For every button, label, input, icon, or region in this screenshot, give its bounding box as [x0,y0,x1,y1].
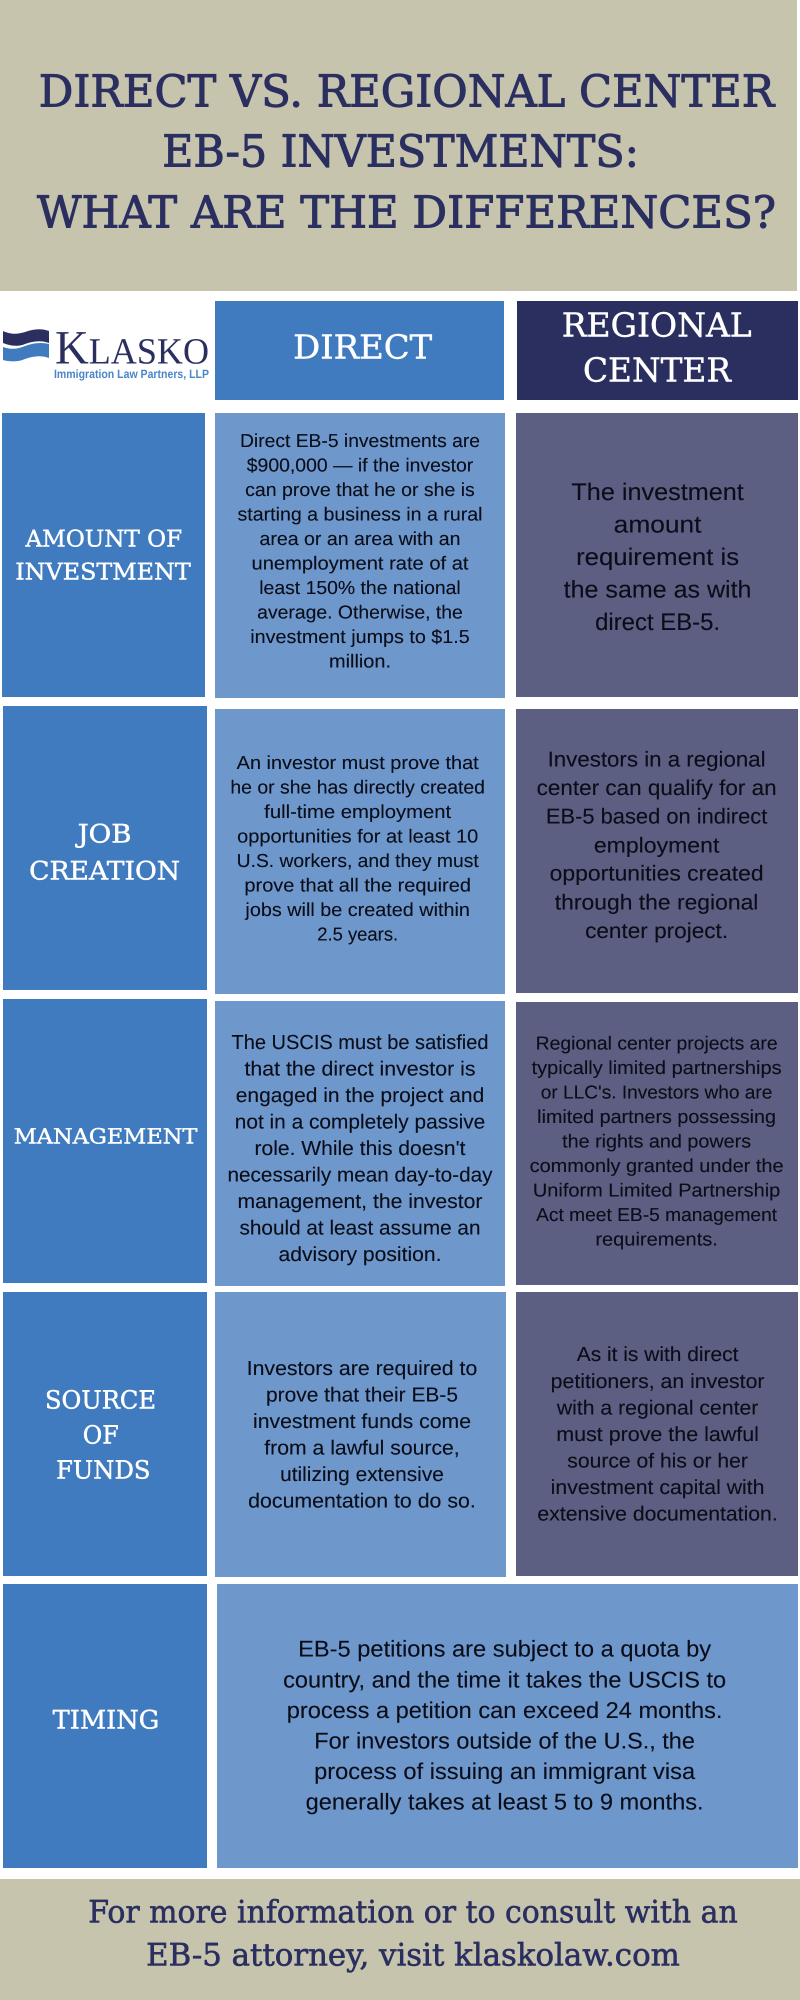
panel: direct amount: unemployment rate of at [252,552,469,574]
logo: Klasko [3,322,209,381]
panel: regional job creation: Investors in a regional [548,748,766,772]
panel: regional source of funds: As it is with direct [577,1344,739,1366]
panel: regional job creation: EB-5 based on indirect [546,805,767,829]
column heading: regional center [517,301,798,400]
panel: regional management: limited partners possessing [537,1106,776,1127]
panel: regional job creation: through the regional [555,891,758,915]
panel: direct source of funds: Investors are required to [247,1358,477,1380]
panel: direct amount: least 150% the national [259,577,461,598]
panel: direct job creation: he or she has directly created [230,776,485,798]
panel: regional amount: the same as with [564,576,751,604]
row label: source of funds: FUNDS [56,1455,150,1484]
panel: direct source of funds [215,1292,506,1577]
panel: timing: country, and the time it takes the USCIS to [283,1666,726,1692]
panel: regional amount: amount [614,512,702,538]
row label: amount of investment: AMOUNT OF [24,527,182,553]
panel: regional job creation: center project. [585,919,728,943]
column heading: regional center: REGIONAL [562,306,752,345]
row label: management: MANAGEMENT [14,1124,197,1148]
panel: direct amount: $900,000 — if the investor [247,454,473,476]
panel: regional source of funds: investment capital with [551,1477,764,1499]
row label: job creation: JOB [74,820,132,850]
panel: regional management: requirements. [595,1228,718,1249]
panel: direct amount [215,413,505,698]
panel: direct amount: starting a business in a rural [238,504,482,524]
panel: regional management: Uniform Limited Partnership [533,1179,780,1200]
row label: job creation: CREATION [29,856,180,886]
panel: direct management: necessarily mean day-to-day [228,1164,493,1186]
panel: direct amount: area or an area with an [260,528,460,549]
panel: direct amount: Direct EB-5 investments are [240,430,480,451]
panel: regional source of funds: with a regional center [556,1398,759,1420]
panel: timing: generally takes at least 5 to 9 months. [306,1789,704,1815]
panel: regional source of funds [516,1292,798,1576]
panel: direct job creation: full-time employment [264,801,452,822]
panel: direct source of funds: investment funds come [253,1411,471,1433]
column heading: direct: DIRECT [293,327,432,366]
panel: direct job creation: An investor must prove that [237,752,480,773]
panel: regional job creation: center can qualify for an [537,776,777,800]
row label: timing [3,1584,207,1868]
panel: direct amount: average. Otherwise, the [257,602,463,622]
panel: regional management: Act meet EB-5 management [536,1204,778,1225]
panel: regional management: typically limited partnerships [532,1057,782,1078]
panel: regional job creation [516,709,798,993]
panel: timing: process of issuing an immigrant visa [314,1758,695,1784]
panel: direct amount: can prove that he or she is [245,479,475,500]
row label: timing: TIMING [53,1705,159,1735]
title: DIRECT VS. REGIONAL CENTER [39,67,776,118]
icon: waves [3,329,49,361]
panel: timing: EB-5 petitions are subject to a quota by [298,1636,712,1662]
panel: direct amount: million. [329,650,391,672]
panel: regional amount: The investment [571,479,744,506]
panel: direct management: The USCIS must be satisfied [232,1032,488,1054]
panel: regional management: or LLC's. Investors who are [541,1081,772,1102]
panel: direct source of funds: prove that their EB-5 [266,1384,458,1406]
panel: direct source of funds: documentation to do so. [248,1490,476,1512]
panel: regional source of funds: petitioners, an investor [551,1371,765,1393]
panel: regional amount: direct EB-5. [595,609,720,636]
panel: regional job creation: employment [594,834,719,858]
column heading: direct [215,301,504,400]
panel: direct management [215,1001,505,1286]
panel: direct job creation: 2.5 years. [317,924,398,944]
row label: source of funds [3,1292,207,1576]
panel: direct job creation: prove that all the required [244,874,471,896]
panel: direct management: should at least assume an [240,1218,480,1240]
row label: source of funds: OF [83,1420,119,1449]
panel: regional management: the rights and powers [562,1130,751,1151]
panel: direct job creation: U.S. workers, and they must [237,850,479,871]
panel: regional management: Regional center projects are [536,1032,778,1053]
panel: direct amount: investment jumps to $1.5 [250,626,470,647]
panel: timing [217,1584,798,1868]
panel: regional source of funds: must prove the lawful [556,1424,759,1446]
title: EB-5 INVESTMENTS: [162,127,639,178]
logo wordmark: KLASKO [55,322,209,374]
panel: regional amount: requirement is [576,544,739,571]
panel: direct job creation: jobs will be created within [244,899,470,920]
title [37,67,776,239]
panel: regional amount [516,413,798,697]
logo tagline: Immigration Law Partners, LLP [54,367,209,381]
row label: source of funds: SOURCE [45,1385,156,1414]
panel: direct management: management, the investor [238,1191,483,1213]
panel: direct management: that the direct investor is [244,1058,476,1080]
panel: direct source of funds: utilizing extensive [280,1464,444,1486]
panel: direct management: not in a completely passive [235,1112,485,1134]
row label: amount of investment: INVESTMENT [15,560,191,586]
column heading: regional center: CENTER [583,351,732,390]
panel: direct management: role. While this doesn't [254,1138,466,1160]
panel: regional management [516,1002,798,1285]
panel: footer call to action: For more information or to consult with an [88,1895,738,1931]
row label: amount of investment [2,413,205,697]
row label: job creation [3,706,207,990]
panel: regional management: commonly granted under the [530,1155,784,1176]
row label: management [3,999,207,1283]
panel: direct source of funds: from a lawful source, [264,1438,460,1460]
panel: regional job creation: opportunities created [550,862,764,886]
panel: header [0,0,797,291]
panel: timing: For investors outside of the U.S., the [314,1728,695,1754]
panel: footer call to action [0,1879,800,2000]
title: WHAT ARE THE DIFFERENCES? [37,188,776,239]
panel: footer call to action: EB-5 attorney, visit klaskolaw.com [146,1938,680,1974]
panel: timing: process a petition can exceed 24 months. [287,1697,722,1723]
panel: direct management: advisory position. [278,1244,442,1266]
panel: regional source of funds: source of his or her [567,1450,748,1472]
panel: direct management: engaged in the project and [236,1085,484,1107]
panel: direct job creation [215,709,505,994]
panel: direct job creation: opportunities for at least 10 [237,826,478,846]
panel: regional source of funds: extensive documentation. [537,1504,778,1526]
